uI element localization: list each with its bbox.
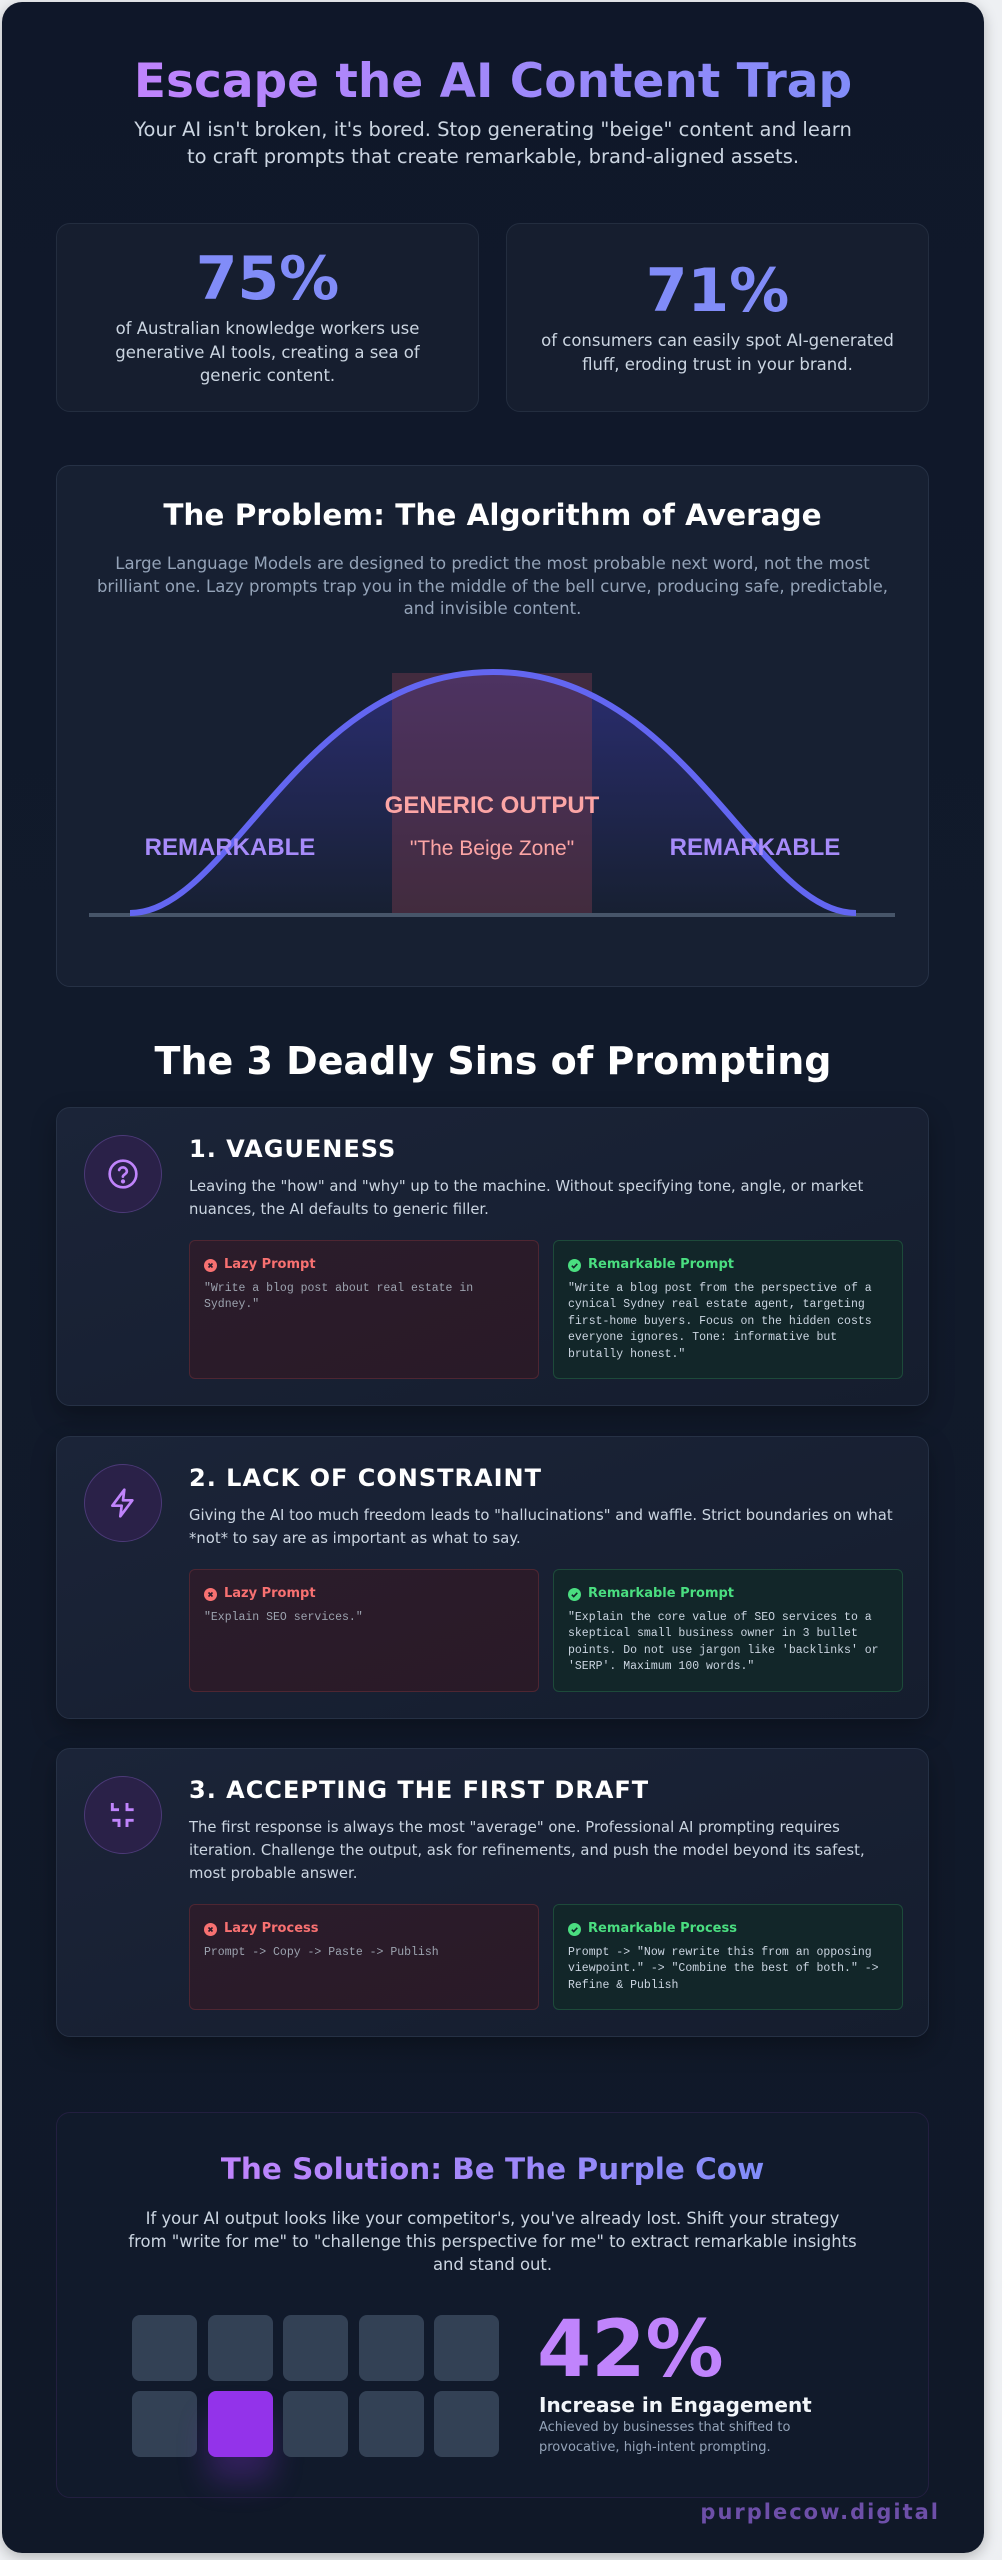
sin 2 description: Giving the AI too much freedom leads to "hallucinations" and waffle. Strict boundaries on what (189, 1506, 893, 1524)
sin 3 title: 3. ACCEPTING THE FIRST DRAFT (189, 1776, 649, 1804)
icon: lightning (84, 1464, 162, 1542)
stat caption: provocative, high-intent prompting. (539, 2440, 771, 2455)
solution text (128, 2208, 857, 2274)
highlighted purple square (208, 2391, 272, 2457)
stat label: Increase in Engagement (539, 2393, 812, 2417)
remarkable prompt 1: cynical Sydney real estate agent, targeting (568, 1298, 865, 1311)
remarkable prompt 2: "Explain the core value of SEO services to a (568, 1610, 872, 1624)
sin 2 description: *not* to say are as important as what to say. (189, 1530, 521, 1546)
sin 2 description (189, 1506, 893, 1546)
subtitle: Your AI isn't broken, it's bored. Stop generating "beige" content and learn (134, 118, 852, 141)
lazy prompt 2: "Explain SEO services." (204, 1610, 363, 1624)
remarkable prompt 2 (553, 1569, 903, 1692)
panel: the solution (56, 2112, 929, 2498)
remarkable process: viewpoint." -> "Combine the best of both." -> (568, 1962, 879, 1975)
sin 3 description: most probable answer. (189, 1864, 357, 1882)
bell curve chart (89, 669, 895, 917)
heading: 3 deadly sins: The 3 Deadly Sins of Prompting (155, 1039, 831, 1083)
sin 1 description: Leaving the "how" and "why" up to the machine. Without specifying tone, angle, or market (189, 1178, 863, 1194)
panel: the problem (56, 465, 929, 987)
problem text (97, 554, 888, 618)
sin card 3: accepting the first draft (56, 1748, 929, 2037)
problem text: and invisible content. (404, 599, 581, 618)
stat number 71: 71% (646, 256, 789, 326)
remarkable prompt 2: 'SERP'. Maximum 100 words." (568, 1660, 754, 1673)
remarkable prompt 2: points. Do not use jargon like 'backlinks' or (568, 1644, 879, 1656)
stat number 75: 75% (196, 244, 339, 314)
remarkable process (553, 1904, 903, 2010)
stat card: 75% (56, 223, 479, 412)
stat text 75: generative AI tools, creating a sea of (115, 342, 420, 362)
remarkable prompt 1: "Write a blog post from the perspective of a (568, 1282, 872, 1294)
lazy prompt 2 (189, 1569, 539, 1692)
solution text: and stand out. (433, 2254, 552, 2274)
problem text: Large Language Models are designed to predict the most probable next word, not the most (115, 554, 870, 573)
stat text 75 (115, 319, 420, 385)
subtitle (134, 118, 852, 168)
remarkable prompt 1: brutally honest." (568, 1348, 685, 1360)
sin 3 description: iteration. Challenge the output, ask for refinements, and push the model beyond its safest, (189, 1842, 865, 1858)
sin 1 title: 1. VAGUENESS (189, 1135, 396, 1163)
stat text 75: of Australian knowledge workers use (116, 319, 419, 338)
chart: purple cow grid (132, 2315, 499, 2494)
lazy prompt 1: "Write a blog post about real estate in (204, 1282, 473, 1294)
title: Escape the AI Content Trap (134, 54, 852, 109)
problem text: brilliant one. Lazy prompts trap you in the middle of the bell curve, producing safe, predictable, (97, 576, 888, 596)
sin 2 title: 2. LACK OF CONSTRAINT (189, 1464, 542, 1492)
stat caption (539, 2420, 790, 2455)
lazy prompt 1: Sydney." (204, 1298, 259, 1311)
icon: question (84, 1135, 162, 1213)
stat text 71: fluff, eroding trust in your brand. (582, 354, 853, 374)
solution text: from "write for me" to "challenge this perspective for me" to extract remarkable insights (128, 2232, 857, 2250)
remarkable prompt 1 (553, 1240, 903, 1379)
solution heading: The Solution: Be The Purple Cow (221, 2152, 764, 2186)
problem heading: The Problem: The Algorithm of Average (163, 498, 822, 532)
subtitle: to craft prompts that create remarkable, brand-aligned assets. (187, 145, 799, 168)
stat text 71 (541, 331, 894, 374)
remarkable prompt 1: Remarkable Prompt (588, 1257, 734, 1272)
bell curve chart: "The Beige Zone" (410, 837, 574, 860)
icon: shrink corners (84, 1776, 162, 1854)
sin 2 comparison boxes (189, 1569, 903, 1692)
sin 3 comparison boxes (189, 1904, 903, 2010)
sin 3 description: The first response is always the most "average" one. Professional AI prompting requires (189, 1818, 840, 1836)
sin card 2: lack of constraint (56, 1436, 929, 1718)
sin 1 description (189, 1178, 863, 1218)
lazy prompt 1 (189, 1240, 539, 1379)
lazy prompt 1: Lazy Prompt (224, 1257, 316, 1272)
remarkable prompt 1: first-home buyers. Focus on the hidden costs (568, 1314, 872, 1328)
remarkable prompt 2: skeptical small business owner in 3 bullet (568, 1627, 858, 1640)
lazy process: Prompt -> Copy -> Paste -> Publish (204, 1946, 439, 1958)
sin 1 description: nuances, the AI defaults to generic filler. (189, 1200, 489, 1218)
remarkable process: Prompt -> "Now rewrite this from an opposing (568, 1946, 872, 1958)
remarkable process: Refine & Publish (568, 1978, 678, 1992)
solution text: If your AI output looks like your competitor's, you've already lost. Shift your strategy (146, 2208, 839, 2228)
stat: 42%: 42% (537, 2305, 724, 2395)
stat card: 71% (506, 223, 929, 412)
remarkable prompt 1: everyone ignores. Tone: informative but (568, 1331, 837, 1344)
sin 3 description (188, 1818, 865, 1882)
sin card 1: vagueness (56, 1107, 929, 1406)
lazy process: Lazy Process (224, 1921, 318, 1936)
stat caption: Achieved by businesses that shifted to (539, 2420, 790, 2435)
sin 1 comparison boxes (189, 1240, 903, 1379)
stat text 75: generic content. (200, 366, 335, 385)
lazy prompt 2: Lazy Prompt (224, 1586, 316, 1601)
bell curve chart: REMARKABLE (670, 834, 840, 861)
bell curve chart: REMARKABLE (145, 834, 315, 861)
lazy process (189, 1904, 539, 2010)
remarkable process: Remarkable Process (588, 1921, 737, 1936)
remarkable prompt 2: Remarkable Prompt (588, 1586, 734, 1601)
stat text 71: of consumers can easily spot AI-generated (541, 331, 894, 350)
bell curve chart: GENERIC OUTPUT (385, 792, 600, 819)
footer brand: purplecow.digital (700, 2500, 940, 2524)
